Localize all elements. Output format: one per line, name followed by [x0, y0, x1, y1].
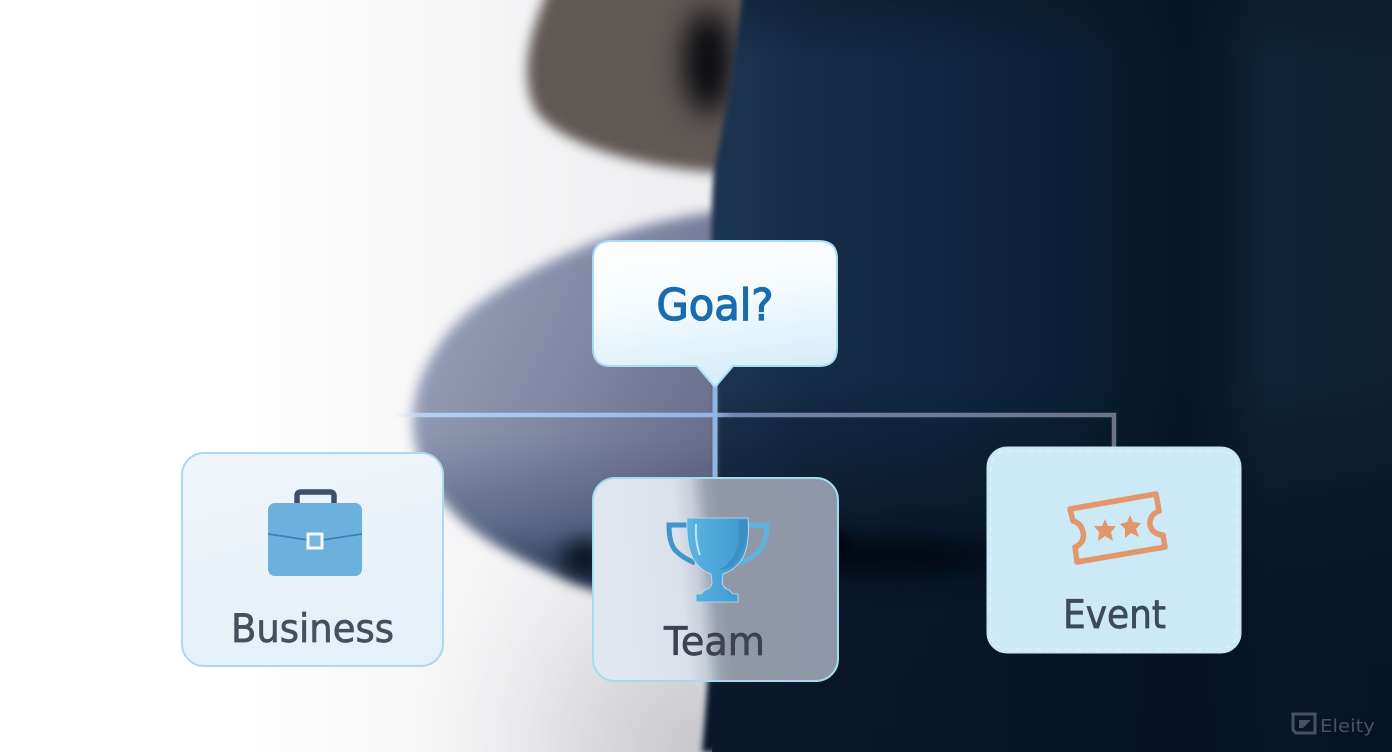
icon: briefcase — [268, 492, 362, 576]
label: Business: Business — [231, 607, 394, 652]
heading: Goal?: Goal? — [656, 280, 774, 331]
label: Event: Event — [1063, 593, 1166, 638]
panel: Team option — [593, 478, 838, 681]
icon: ticket with stars — [1070, 494, 1165, 562]
label: Team: Team — [663, 620, 765, 665]
icon: trophy — [669, 518, 767, 602]
panel: Event option — [987, 447, 1241, 653]
watermark — [1293, 714, 1375, 737]
watermark: Eleity — [1320, 716, 1375, 737]
panel: Business option — [182, 453, 443, 666]
connector: branch line to Business, Team and Event — [395, 384, 1114, 480]
panel: Goal question bubble — [593, 241, 837, 386]
